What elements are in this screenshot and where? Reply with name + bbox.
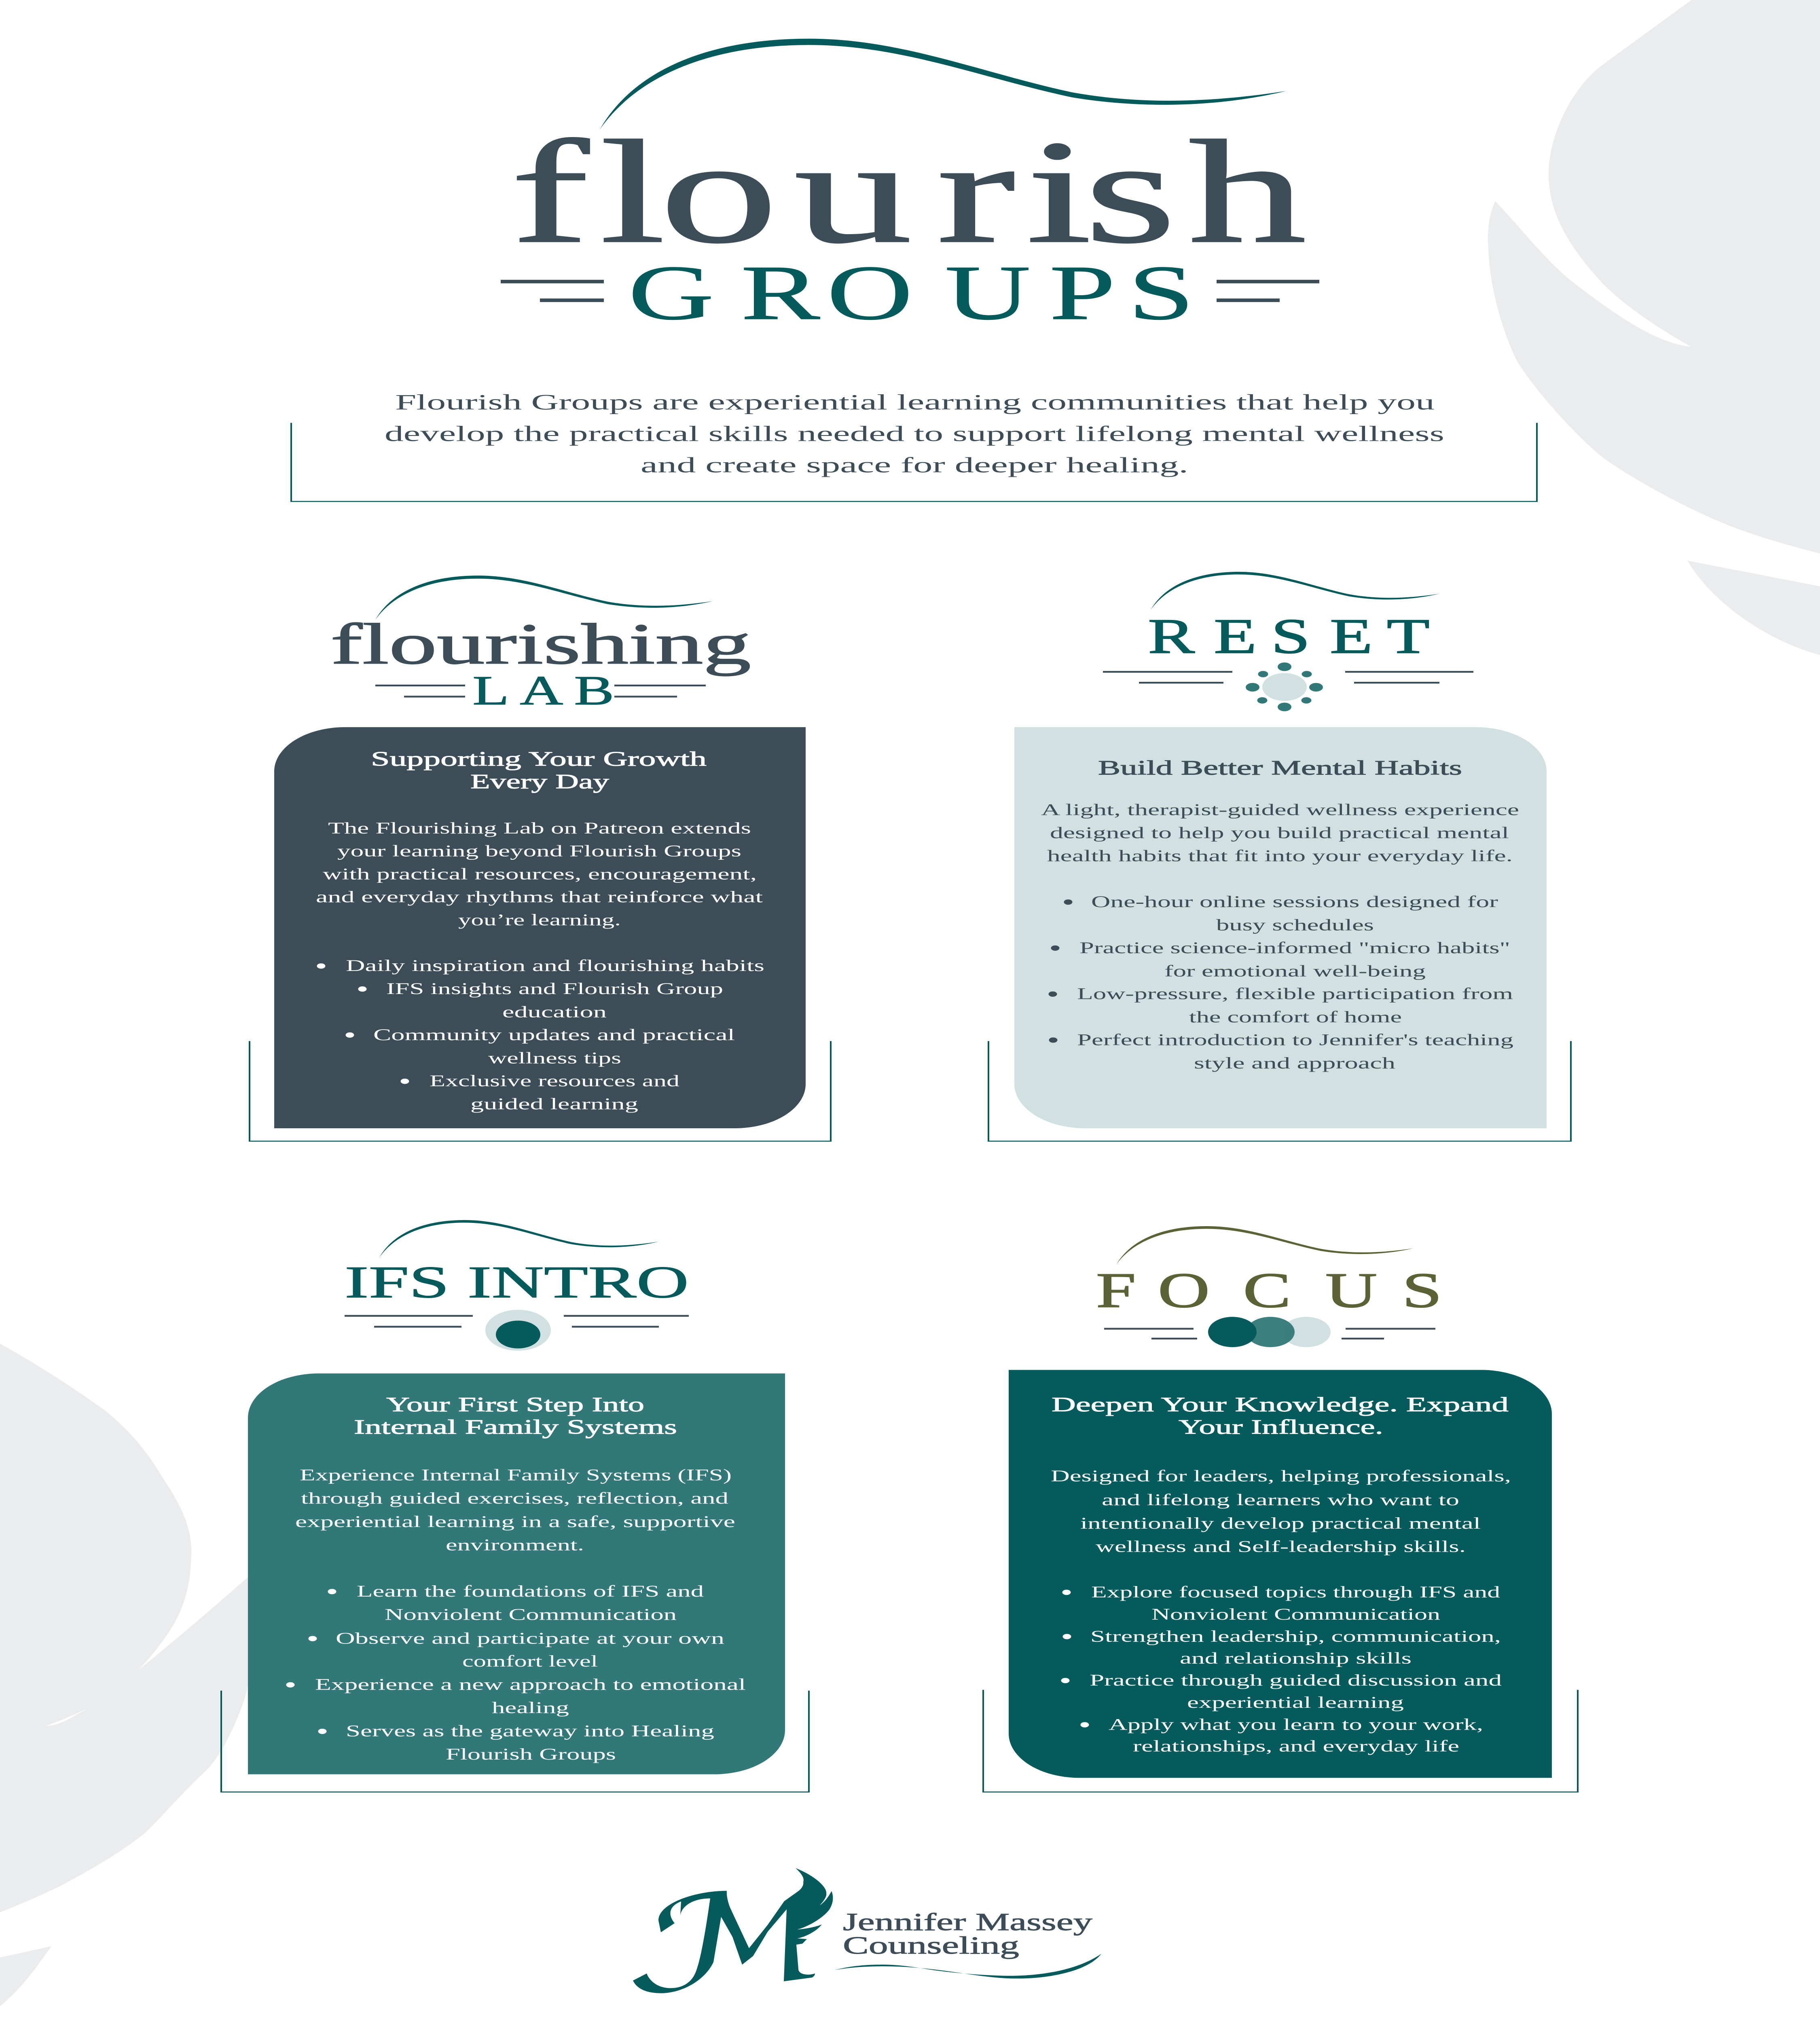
reset bullet list (1048, 893, 1513, 1072)
intro bracket (291, 423, 1537, 501)
monogram M with feather (633, 1868, 833, 1993)
ifs intro bullet list: Learn the foundations of IFS and (357, 1582, 704, 1600)
ifs intro bullet list: Flourish Groups (446, 1745, 616, 1763)
flourishing lab heading: Every Day (470, 770, 609, 793)
footer name: Jennifer Massey (843, 1908, 1092, 1936)
reset logo (1103, 572, 1473, 711)
focus logo: FOCUS (1096, 1263, 1442, 1318)
focus description (1051, 1467, 1511, 1555)
flourishing lab card background (274, 727, 806, 1128)
ifs intro bullet list: comfort level (462, 1652, 598, 1670)
flourishing lab logo: LAB (472, 667, 614, 713)
flourishing lab description: you’re learning. (458, 911, 621, 929)
reset bullet list: Perfect introduction to Jennifer's teaching (1077, 1030, 1513, 1049)
ifs intro heading: Your First Step Into (386, 1393, 644, 1416)
intro block (291, 390, 1537, 501)
reset bullet list: busy schedules (1216, 916, 1374, 934)
ifs intro bracket (221, 1691, 809, 1792)
intro text (385, 390, 1444, 477)
reset bracket (988, 1041, 1571, 1141)
panel: reset (988, 572, 1571, 1141)
flourishing lab bullet list: IFS insights and Flourish Group (386, 979, 723, 998)
background leaf shapes: top right (1488, 0, 1820, 655)
flourishing lab bullet list (317, 956, 764, 1113)
flourishing lab bullet list: wellness tips (488, 1049, 621, 1067)
ifs intro description: experiential learning in a safe, supportive (295, 1512, 735, 1531)
ifs intro description (295, 1466, 735, 1554)
reset bullet list: One-hour online sessions designed for (1091, 893, 1498, 911)
flourishing lab bullet list: education (502, 1003, 607, 1021)
reset card background (1014, 727, 1547, 1128)
panel: ifs intro (221, 1220, 809, 1792)
reset bullet list: Practice science-informed "micro habits" (1079, 939, 1510, 957)
background leaf shapes: bottom left (0, 1343, 257, 2006)
title swoosh (600, 39, 1286, 129)
focus description: wellness and Self-leadership skills. (1096, 1538, 1466, 1555)
flourishing lab bullet list: Daily inspiration and flourishing habits (346, 956, 764, 975)
ifs intro logo (345, 1220, 689, 1351)
focus bullet list: Nonviolent Communication (1151, 1605, 1440, 1623)
focus description: and lifelong learners who want to (1102, 1491, 1459, 1509)
focus bullet list: Strengthen leadership, communication, (1090, 1627, 1501, 1645)
focus heading (1052, 1393, 1509, 1438)
reset bullet list: for emotional well-being (1164, 962, 1426, 980)
ifs intro bullet list: Nonviolent Communication (385, 1605, 677, 1624)
flourishing lab bullet list: Community updates and practical (373, 1026, 735, 1044)
focus card background (1009, 1370, 1552, 1778)
flourishing lab bullet list: guided learning (470, 1095, 638, 1113)
focus heading: Deepen Your Knowledge. Expand (1052, 1393, 1509, 1416)
footer name (843, 1908, 1092, 1959)
panel: flourishing lab (250, 575, 831, 1141)
focus bullet list: Practice through guided discussion and (1090, 1671, 1502, 1689)
ifs intro heading (354, 1393, 677, 1438)
panel: focus (983, 1226, 1578, 1792)
focus bracket (983, 1690, 1578, 1792)
ifs intro bullet list: healing (492, 1698, 569, 1717)
reset bullet list: Low-pressure, flexible participation from (1077, 985, 1513, 1003)
reset bullet list: style and approach (1194, 1054, 1395, 1072)
ifs intro logo: IFS INTRO (345, 1257, 689, 1307)
title word: flourish: flourish (510, 110, 1307, 274)
flourishing lab logo (330, 575, 751, 713)
flourishing lab description (316, 819, 763, 929)
focus description: intentionally develop practical mental (1080, 1514, 1481, 1532)
title logo: flourish groups (501, 39, 1319, 336)
ifs intro bullet list: Serves as the gateway into Healing (346, 1722, 714, 1740)
intro text: develop the practical skills needed to support lifelong mental wellness (385, 422, 1444, 446)
reset heading: Build Better Mental Habits (1098, 756, 1462, 779)
focus description: Designed for leaders, helping professionals, (1051, 1467, 1511, 1485)
focus bullet list: Explore focused topics through IFS and (1091, 1583, 1500, 1601)
flourishing lab bullet list: Exclusive resources and (430, 1072, 679, 1090)
ifs intro card background (248, 1373, 785, 1775)
ifs intro description: Experience Internal Family Systems (IFS) (300, 1466, 732, 1484)
reset description: A light, therapist-guided wellness experience (1041, 801, 1519, 819)
flourishing lab heading (371, 747, 707, 793)
ifs intro heading: Internal Family Systems (354, 1415, 677, 1438)
ifs intro bullet list: Observe and participate at your own (336, 1629, 724, 1647)
flourishing lab logo: flourishing (330, 612, 751, 676)
focus heading: Your Influence. (1179, 1415, 1383, 1438)
flourishing lab description: The Flourishing Lab on Patreon extends (328, 819, 751, 837)
flourishing lab bracket (250, 1041, 831, 1141)
focus bullet list (1061, 1583, 1502, 1755)
ifs intro bullet list: Experience a new approach to emotional (315, 1675, 746, 1694)
focus bullet list: experiential learning (1187, 1693, 1404, 1711)
footer swoosh (834, 1954, 1101, 1979)
footer logo: jennifer massey counseling (633, 1868, 1101, 1993)
title side lines (501, 280, 1319, 302)
intro text: and create space for deeper healing. (641, 453, 1188, 477)
reset logo: RESET (1148, 609, 1430, 664)
flourishing lab heading: Supporting Your Growth (371, 747, 707, 770)
ifs intro description: environment. (446, 1536, 584, 1554)
reset description (1041, 801, 1519, 865)
focus logo (1096, 1226, 1442, 1347)
focus bullet list: and relationship skills (1180, 1649, 1412, 1667)
reset description: designed to help you build practical mental (1050, 824, 1509, 842)
ifs intro bullet list (286, 1582, 746, 1763)
reset bullet list: the comfort of home (1189, 1008, 1402, 1026)
title word: groups: GROUPS (628, 250, 1194, 336)
intro text: Flourish Groups are experiential learning communities that help you (395, 390, 1435, 414)
ifs intro description: through guided exercises, reflection, and (301, 1489, 728, 1507)
reset description: health habits that fit into your everyday life. (1047, 846, 1513, 865)
focus bullet list: Apply what you learn to your work, (1109, 1715, 1483, 1733)
flourishing lab description: your learning beyond Flourish Groups (337, 842, 741, 860)
focus bullet list: relationships, and everyday life (1133, 1737, 1459, 1755)
footer name: Counseling (843, 1932, 1019, 1959)
flourishing lab description: with practical resources, encouragement, (323, 865, 757, 883)
flourishing lab description: and everyday rhythms that reinforce what (316, 888, 763, 906)
